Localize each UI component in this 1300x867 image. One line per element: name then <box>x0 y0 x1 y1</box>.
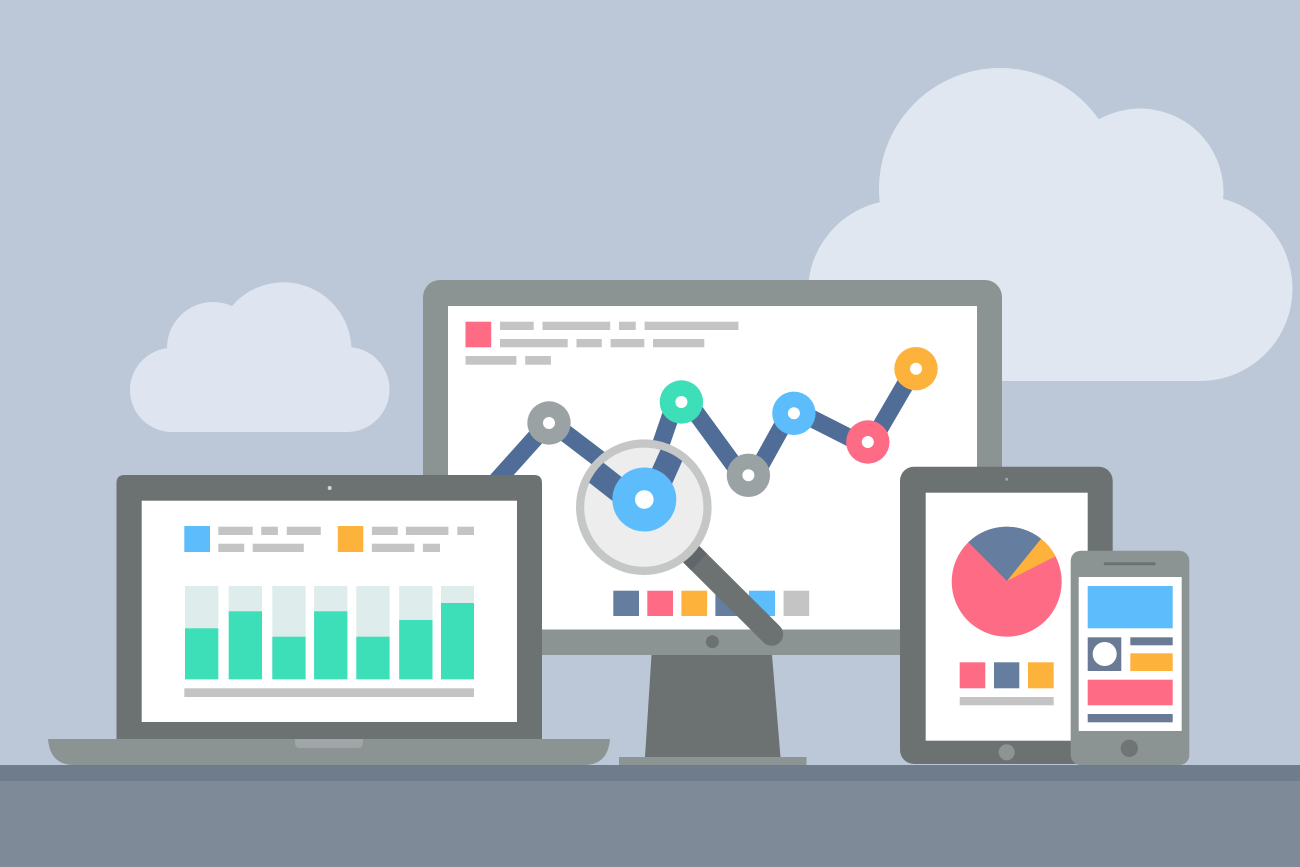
tablet home button <box>999 744 1015 760</box>
chart node grey low <box>727 454 770 497</box>
phone avatar block <box>1088 637 1121 671</box>
phone bottom line <box>1088 714 1173 722</box>
monitor <box>423 280 1002 765</box>
chart node pink <box>846 420 890 464</box>
magnifier handle <box>690 553 772 634</box>
tablet camera <box>1005 478 1008 481</box>
chart node blue <box>772 392 816 435</box>
monitor screen <box>448 306 977 630</box>
laptop lid <box>116 475 542 739</box>
tablet swatches <box>960 662 1054 705</box>
line chart <box>475 347 938 505</box>
phone blue banner <box>1088 586 1173 628</box>
magnified chart detail <box>589 450 682 532</box>
phone yellow block <box>1130 653 1173 671</box>
laptop base <box>48 739 610 765</box>
monitor power button <box>706 635 719 648</box>
phone pink block <box>1088 680 1173 705</box>
monitor colour swatches <box>613 591 809 616</box>
phone screen <box>1079 577 1182 731</box>
phone home button <box>1121 740 1138 757</box>
phone speaker <box>1104 562 1156 565</box>
bar chart <box>184 586 474 697</box>
chart node green <box>660 380 703 424</box>
icon: small cloud <box>130 282 390 432</box>
desk surface <box>0 765 1300 867</box>
phone top line <box>1130 637 1173 645</box>
magnifying glass <box>575 444 772 634</box>
monitor frame <box>423 280 1002 655</box>
tablet frame <box>900 467 1113 764</box>
chart line segments <box>475 366 916 505</box>
laptop camera <box>328 486 332 490</box>
monitor stand base <box>619 757 806 765</box>
laptop <box>48 475 610 765</box>
chart node grey <box>527 401 571 445</box>
icon: large cloud <box>808 68 1292 384</box>
chart node yellow <box>894 347 938 390</box>
tablet screen <box>926 493 1088 741</box>
phone frame <box>1071 551 1189 765</box>
magnifier collar <box>690 553 699 562</box>
monitor header: pink square and text lines <box>466 322 738 365</box>
magnifier lens <box>580 444 708 571</box>
phone <box>1071 551 1189 765</box>
laptop legend <box>184 526 474 552</box>
pie chart <box>952 527 1062 637</box>
tablet <box>900 467 1113 764</box>
laptop notch <box>295 739 363 748</box>
laptop screen <box>142 501 517 722</box>
monitor stand <box>645 655 780 757</box>
